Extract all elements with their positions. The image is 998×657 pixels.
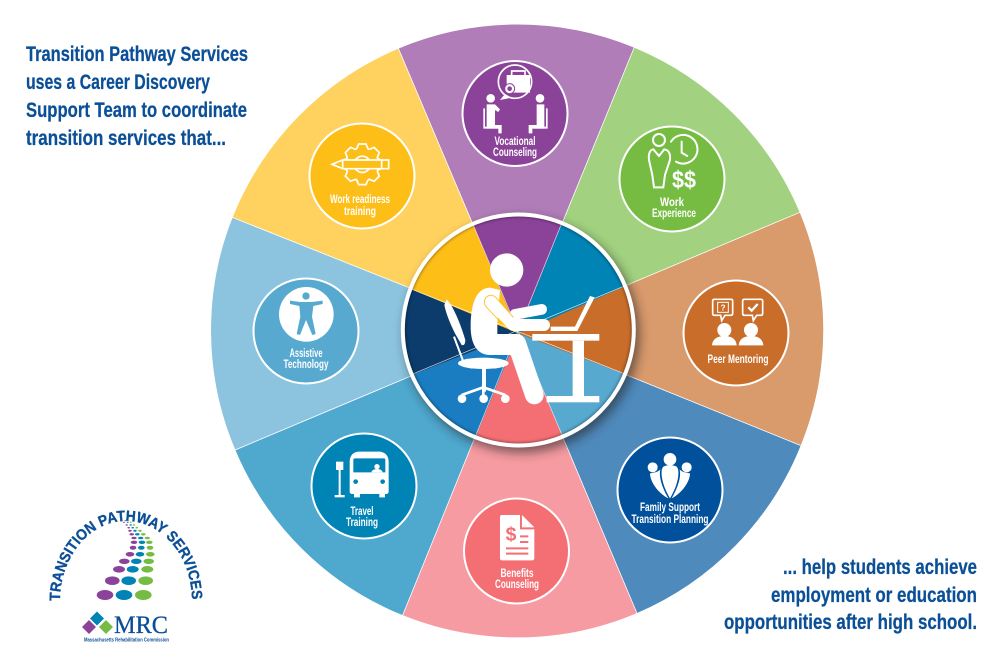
label [346, 506, 378, 529]
segment: assistive technology [211, 217, 518, 450]
label [495, 568, 539, 591]
icon: student at desk [444, 253, 599, 403]
logo: MRC diamonds [82, 612, 113, 634]
badge: work experience [620, 126, 724, 232]
intro text: uses a Career Discovery [26, 71, 210, 94]
label: Work readiness [330, 194, 390, 206]
label: Experience [652, 208, 696, 220]
outcome text [724, 556, 977, 634]
badge: peer mentoring [684, 280, 788, 386]
chair [444, 299, 510, 403]
label: Vocational [494, 136, 536, 148]
badge: family support [618, 438, 722, 542]
icon: two peers with speech boxes: ? [720, 303, 726, 313]
icon: bus and stop [335, 452, 389, 497]
label: Travel [350, 506, 374, 518]
hub shadow [404, 217, 640, 453]
segment: benefits counseling [402, 331, 637, 638]
label [284, 348, 329, 371]
segment: family support [518, 331, 801, 613]
icon: gear and pencil [332, 144, 389, 185]
icon: accessibility figure [279, 287, 334, 342]
intro text: Support Team to coordinate [26, 99, 247, 122]
label [652, 197, 696, 220]
label: Benefits [500, 568, 534, 580]
label: Assistive [290, 348, 322, 360]
badge: travel training [312, 434, 416, 538]
central hub [400, 212, 636, 448]
icon: counseling session [483, 65, 548, 133]
label: Family Support [640, 502, 700, 514]
label: Peer Mentoring [708, 354, 768, 366]
segment: peer mentoring [518, 212, 824, 446]
label [493, 136, 537, 159]
icon: benefits document: $ [506, 525, 517, 546]
logo dotted pathway [97, 520, 155, 600]
wheel of services [211, 24, 825, 638]
badge: work readiness training [310, 124, 414, 228]
label [632, 502, 708, 526]
label: Counseling [493, 147, 537, 159]
segment: travel training [235, 331, 518, 616]
label: Training [346, 517, 378, 529]
label [330, 194, 390, 218]
logo: MRC wordmark: MRC [114, 612, 168, 639]
student figure [471, 253, 544, 395]
segment: work readiness [232, 48, 518, 331]
badge: vocational counseling [462, 61, 568, 166]
badge: assistive technology [254, 278, 358, 384]
label: Technology [284, 359, 329, 371]
icon: person, clock and money: $$ [672, 166, 696, 193]
label: Work [660, 197, 685, 209]
intro text [26, 43, 248, 150]
intro text: Transition Pathway Services [26, 43, 248, 66]
laptop [551, 296, 595, 331]
segment: vocational counseling [398, 24, 634, 331]
label: Transition Planning [632, 514, 708, 526]
badge: benefits counseling [464, 498, 569, 604]
segment: work experience [518, 47, 800, 331]
logo arc text: TRANSITION PATHWAY SERVICES [49, 510, 202, 601]
label: training [344, 206, 376, 218]
logo: Transition Pathway Services [49, 510, 202, 644]
label: Counseling [495, 579, 539, 591]
desk [532, 334, 599, 402]
logo: agency name: Massachusetts Rehabilitation Commission [84, 638, 169, 644]
intro text: transition services that... [26, 127, 226, 150]
icon: family group [648, 453, 692, 498]
